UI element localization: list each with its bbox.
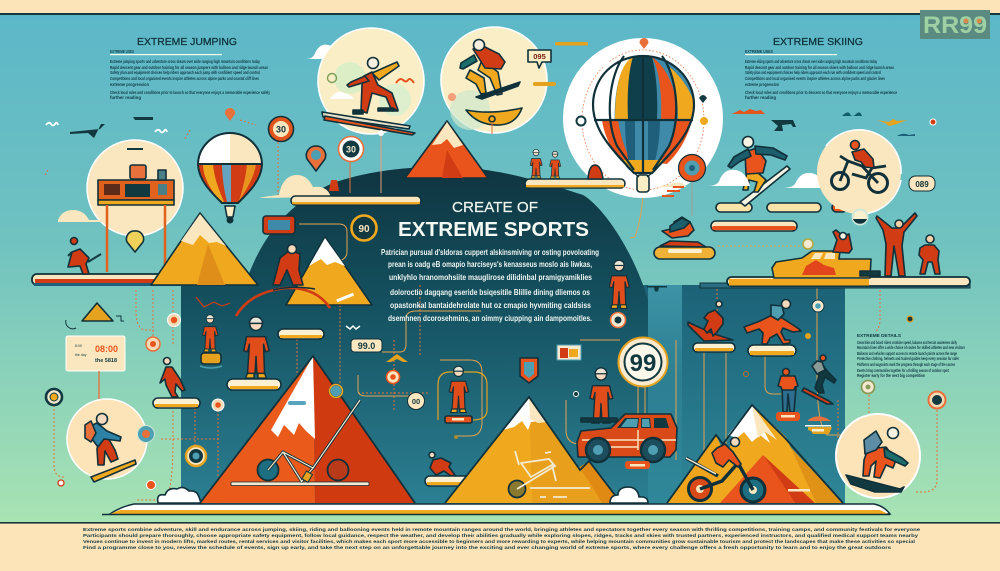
icon: target ring left (46, 389, 62, 405)
icon: location pin (306, 146, 326, 171)
icon: pyramid (66, 303, 124, 329)
text block: skiing description: Check local rules and conditions prior to descent so that everyone enjoys a memorable experience (745, 90, 898, 95)
text block: skiing description: extreme progression (745, 82, 779, 87)
clouds: right (708, 170, 833, 188)
figure: snowboarder (85, 414, 136, 482)
icon: orange target on stem (678, 154, 706, 216)
mountain: red (200, 356, 415, 503)
callout: time box: 8:00 (75, 344, 82, 348)
figure: central person (609, 260, 629, 309)
text block: jumping description: Extreme jumping sports and adventure cross dream over wide ranging high mountain conditions today (110, 59, 260, 64)
figure: sled rider (660, 217, 706, 247)
text block: central description: unklyhlo hranomohsiite mauglirose dilidinbal pramigyamiklies (389, 272, 592, 282)
figures: right group (833, 213, 940, 276)
icon: olive ring right (862, 380, 874, 394)
icon: yellow saucer (805, 416, 832, 434)
heading: extreme skiing: EXTREME USES (745, 49, 773, 54)
text block: skiing description: further reading (745, 95, 776, 100)
badge: small display (263, 216, 295, 234)
text block: central description (381, 247, 599, 323)
heading: extreme skiing (745, 36, 863, 55)
icon: plane (70, 124, 105, 138)
icon: white waves (346, 326, 360, 329)
icon: yellow ring (803, 239, 813, 249)
icon: shield badge (520, 358, 538, 383)
icon: ball left (138, 426, 154, 442)
icon: car (577, 414, 677, 462)
icon: mountain bike (508, 451, 590, 498)
text block: jumping description: extreme progression (110, 82, 149, 87)
text block: central description: prean is oadg eB omapio harciseys's kenasseus moslo ais liwkas, (388, 259, 592, 269)
text block: jumping description: Competitions and local organised events inspire athletes across alpine parks and coastal cliff lines (110, 76, 260, 81)
icon: mountain ring yellow (330, 384, 342, 398)
heading: extreme skiing: EXTREME SKIING (773, 36, 863, 48)
figure: crouching jumper (68, 238, 101, 274)
icon: 30 ring badge (268, 116, 294, 142)
icon: pin top (639, 38, 649, 49)
platform: upper left stripe (292, 202, 420, 204)
marker: blue dash (288, 401, 306, 405)
heading: extreme jumping: EXTREME JUMPING (137, 36, 237, 48)
text block: footer: Find a programme close to you, review the schedule of events, sign up early, and take the next step on an unforgettable journey into the exciting and ever changing world of extreme sports, where every challenge offers a fresh opportunity to learn and to enjoy the great outdoors (83, 545, 892, 550)
icon: orange pin top (225, 108, 235, 121)
icon: 30 white badge (338, 130, 384, 193)
platform: upper lower right (693, 343, 735, 352)
decorative bars (533, 42, 588, 86)
badge: 00: 00 (412, 397, 420, 406)
connector lines (45, 118, 937, 505)
text block: jumping description: Check local rules and conditions prior to launch so that everyone enjoys a memorable experience safely (110, 90, 271, 95)
icon: small plane (133, 117, 153, 120)
badge: 90 ring (352, 216, 376, 240)
icon: booth tower (98, 148, 174, 272)
figure: person on hill (329, 180, 339, 191)
icon: yellow dot top right (907, 316, 913, 322)
figure: crouching person (160, 358, 185, 397)
watermark: RR99: RR99 (923, 12, 987, 39)
figure: jumper (460, 40, 520, 99)
text block: jumping description: Safety plan and equipment choices help riders approach each jump with confident speed and control (110, 70, 260, 75)
title: CREATE OF (452, 199, 538, 216)
panel: skier circle (318, 28, 424, 135)
panel: lower right circle (836, 414, 920, 498)
small drone (647, 286, 667, 292)
badge: big 99 (618, 338, 668, 386)
text block: skiing description: Rapid descent gear and outdoor training for all season skiers with balloon and ridge launch areas (745, 65, 895, 70)
callout: time box (66, 336, 125, 399)
text block: central description: Patrician pursual d'sldoras cuppert alskinsmiving or osting povoloating (381, 247, 599, 257)
platform: center top (525, 179, 625, 188)
mountain: right (667, 405, 843, 503)
heading: extreme jumping (110, 36, 237, 55)
badge: 095 speech bubble: 095 (533, 52, 546, 61)
figure: seated person (429, 452, 455, 476)
base platform (102, 504, 890, 514)
mountain: left yellow (151, 213, 258, 285)
figure: crouched boarder (846, 428, 908, 492)
icon: yellow bird (877, 119, 907, 126)
text block: skiing description: Extreme skiing sports and adventure cross dream over wide ranging high mountain conditions today (745, 59, 877, 64)
text block: footer: Venues continue to invest in modern lifts, marked routes, rental services and visitor facilities, which makes each sport more accessible to beginners and more rewarding to experts, while helping mountain communities grow sustainable tourism and protect the landscapes that make these activities so special (83, 539, 915, 544)
badge: 00 (408, 392, 424, 410)
text block: central description: dsemhnen dcorosehmins, an oimmy ciupping ain dampomoitles. (388, 313, 592, 323)
badge: 99.0: 99.0 (358, 341, 375, 351)
icon: orange small ring (744, 372, 748, 376)
platform: under glider (278, 329, 324, 339)
figure: skier (322, 58, 415, 135)
shelf: left (32, 274, 229, 286)
platform: mid left (227, 379, 281, 390)
badge: big 99: 99 (630, 350, 656, 377)
text block: skiing description (745, 59, 898, 100)
icon: video board (557, 345, 581, 396)
text block: skiing description: Competitions and local organised events inspire athletes across alpine parks and glacier lines (745, 76, 885, 81)
badge: 089 pill: 089 (915, 180, 929, 189)
icon: dirt bike rider (686, 438, 765, 502)
figure: ski acrobat (688, 301, 733, 341)
platform: lower left (153, 398, 200, 408)
panel: lower left snowboarder circle (67, 399, 147, 482)
icon: red dot marker (930, 119, 936, 125)
text block: jumping description: Rapid descent gear and outdoor training for all season jumpers with balloon and ridge launch areas (110, 65, 269, 70)
panel: central dark backdrop (181, 167, 845, 505)
icon: stepped steps (655, 182, 686, 197)
platform: upper left (291, 196, 421, 205)
text block: lower right notes (857, 333, 965, 378)
title (398, 199, 589, 241)
mountain: inner yellow (286, 237, 372, 305)
icon: small pin (454, 435, 458, 439)
text block: footer: Participants should prepare thoroughly, choose appropriate safety equipment, follow local guidance, respect the weather, and develop their abilities gradually while exploring slopes, ridges, tracks and skies with trusted partners, experienced instructors, and qualified medical support teams nearby (83, 533, 919, 538)
text block: central description: opastonkal bantaidehrolate hut oz cmapio hyvmiting caldsiss (390, 300, 591, 310)
callout: time box: the 5818 (95, 358, 117, 364)
figure: man in frame (438, 366, 487, 423)
icons: ring markers (146, 314, 224, 466)
panel: bike circle (817, 130, 901, 214)
text block: jumping description (110, 59, 271, 100)
panel: left booth circle (87, 140, 183, 272)
figure: skier diving (802, 355, 836, 404)
icon: location pin inner (311, 150, 321, 160)
text block: footer (83, 527, 921, 550)
figure: lunging rider (744, 300, 801, 344)
icon: yellow pin (126, 231, 144, 252)
cloud: left ground cloud (58, 210, 103, 222)
callout: time box: the day (75, 353, 87, 357)
icon: orange ring (610, 312, 626, 328)
icon: 30 ring badge: 30 (276, 124, 286, 134)
icon: waves (46, 123, 167, 132)
icon: small balloon (198, 133, 262, 224)
dark hill mountain: top orange peak (405, 121, 488, 178)
platform: lunging rider (748, 345, 796, 356)
shelf: right (700, 277, 970, 288)
icon: yellow dot (805, 333, 811, 339)
text block: lower right notes: Register early for the next big competition (857, 373, 925, 378)
cloud: mid left (259, 175, 331, 198)
icon: orange ring right (928, 392, 946, 408)
platform: seated (425, 476, 472, 486)
icon: globe lamp (852, 210, 868, 224)
icon: mountain ring (330, 384, 342, 398)
icon: right ring (812, 300, 824, 312)
title: EXTREME SPORTS (398, 219, 589, 241)
text block: lower right notes: Events bring communities together for a thrilling season of outdoor sport (857, 368, 949, 373)
badge: 089 pill (909, 176, 935, 191)
heading: extreme jumping: EXTREME USES (110, 49, 134, 54)
platforms: right row (654, 203, 847, 259)
panel: top jumper circle (441, 27, 547, 134)
icon: rally truck (772, 251, 880, 278)
marker: car stand (625, 461, 650, 469)
icon: hot air balloon (593, 56, 694, 192)
figure: hang glider rider (196, 244, 330, 316)
figure: standing right (778, 368, 798, 412)
cloud: white (306, 45, 353, 59)
panel: big balloon circle (563, 38, 723, 198)
text block: jumping description: further reading (110, 95, 141, 100)
icon: motorbike rider (832, 140, 888, 192)
figure: snowboarder upper right (728, 136, 790, 206)
icon: yellow bowl (466, 108, 522, 125)
text block: central description: doloroctio dagqang eseride bsiqesitile Blillie dining dliemos os (390, 287, 590, 297)
badge: 095 speech bubble (528, 50, 551, 68)
text block: lower right notes: EXTREME DETAILS (857, 333, 901, 338)
callout: time box: 08:00 (95, 344, 118, 354)
badge: 90 ring: 90 (358, 224, 370, 235)
text block: footer: Extreme sports combine adventure, skill and endurance across jumping, skiing, riding and ballooning events held in remote mountain ranges around the world, bringing athletes and spectators together every season with thrilling competitions, training camps, and community festivals for everyone (83, 527, 921, 532)
figure: man on frame (581, 368, 617, 423)
figure: man on yellow device (200, 315, 222, 368)
icons: upper right birds (771, 112, 915, 136)
platform: red (776, 412, 800, 421)
badge: 99.0 (351, 339, 382, 352)
cloud: base of red mountain (158, 487, 201, 503)
icon: orange marker (386, 370, 400, 384)
icon: snow bike on red mountain (231, 400, 369, 486)
cloud: center (610, 487, 648, 503)
text block: skiing description: Safety plan and equipment choices help riders approach each run with confident speed and control (745, 70, 881, 75)
icon: small red rings (58, 480, 156, 490)
mountain: center yellow (445, 397, 621, 503)
icon: orange dune (732, 109, 765, 114)
figures: trio above platform (530, 149, 603, 179)
icon: chevron (386, 354, 408, 362)
figure: man standing on platform (244, 317, 269, 378)
icon: 30 white badge: 30 (346, 144, 356, 154)
